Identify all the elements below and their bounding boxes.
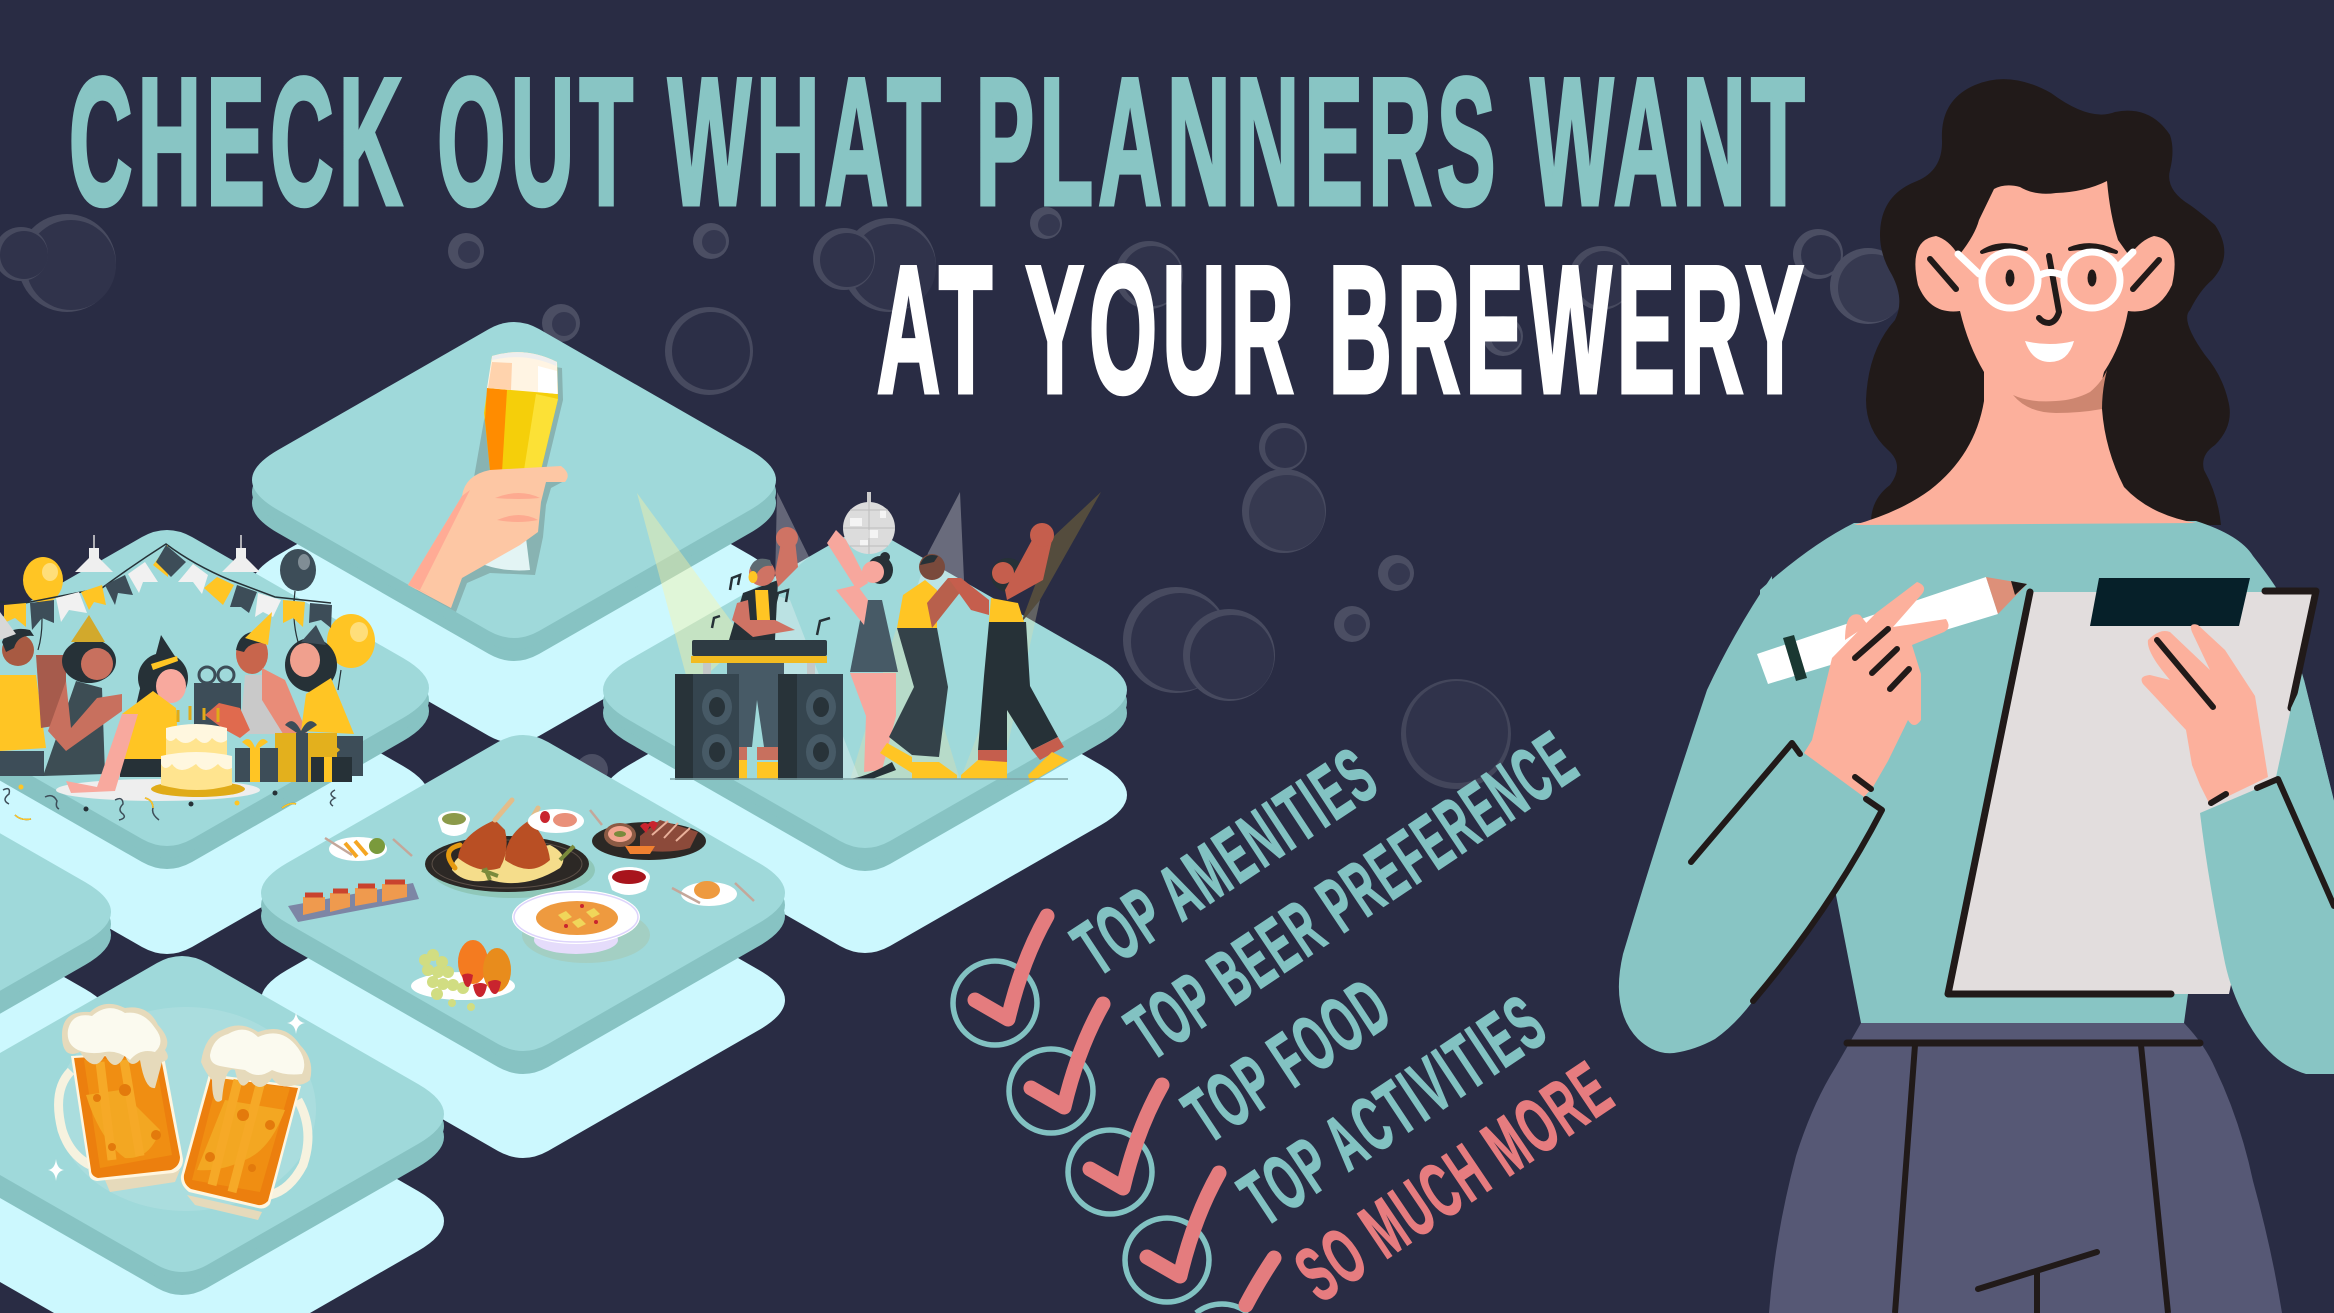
bunting xyxy=(0,544,332,630)
speakers xyxy=(675,674,843,780)
dancer man xyxy=(880,554,962,779)
hand right xyxy=(2142,624,2268,805)
party gift box xyxy=(194,667,241,731)
arm left xyxy=(1619,576,1882,1053)
check item five xyxy=(1196,1258,1274,1313)
nose xyxy=(2039,256,2059,323)
dancer woman two xyxy=(948,523,1068,783)
skirt pleats xyxy=(1895,1045,2168,1313)
pencil xyxy=(1757,577,2027,684)
woman planner xyxy=(1619,79,2334,1313)
tile: mugs xyxy=(0,956,444,1313)
sleeve left lines xyxy=(1691,743,1882,1001)
mug left xyxy=(59,1004,183,1192)
arm right sleeve xyxy=(2200,680,2334,1074)
fruit plate xyxy=(411,940,515,1011)
party lamps xyxy=(75,535,260,572)
tile: left edge xyxy=(0,754,111,1177)
party guest two xyxy=(43,615,122,776)
party guest one xyxy=(0,612,66,776)
mouth xyxy=(2025,341,2074,362)
eyebrows xyxy=(1982,245,2116,252)
main plate xyxy=(425,800,595,898)
sleeve right lines xyxy=(2257,779,2334,906)
illustration: hand holding beer glass xyxy=(408,352,568,612)
mug right xyxy=(181,1025,311,1220)
belt xyxy=(1847,1040,2200,1046)
tile: dj xyxy=(603,532,1127,953)
glasses xyxy=(1958,252,2133,308)
clipboard paper xyxy=(1948,592,2314,994)
music notes xyxy=(712,575,830,635)
checklist xyxy=(953,916,1274,1313)
party guest five xyxy=(285,625,363,776)
birthday cake xyxy=(151,706,245,797)
stage lights xyxy=(637,492,1101,780)
disco ball xyxy=(843,492,895,554)
party balloons xyxy=(23,549,375,690)
sushi tray xyxy=(288,882,419,922)
skirt xyxy=(1769,1023,2282,1313)
list: top beer preference: TOP BEER PREFERENCE xyxy=(1112,714,1593,1076)
hand left xyxy=(1804,582,1949,797)
check item two xyxy=(1009,1004,1103,1133)
list: so much more: SO MUCH MORE xyxy=(1280,1044,1628,1313)
ears xyxy=(1915,236,2175,311)
list: top activities: TOP ACTIVITIES xyxy=(1225,977,1562,1242)
illustration: dj and dancers xyxy=(637,492,1101,783)
soup bowl xyxy=(512,890,650,963)
party guest three xyxy=(66,635,188,793)
torso and shoulders xyxy=(1760,521,2334,1023)
illustration: birthday party xyxy=(0,535,375,820)
clipboard clip xyxy=(2090,578,2250,626)
party guest four xyxy=(205,612,310,745)
illustration: food spread xyxy=(288,800,754,1011)
dancer woman xyxy=(827,530,898,779)
sparkles xyxy=(48,1012,305,1181)
tile: party xyxy=(0,530,429,954)
meat plate xyxy=(592,820,706,860)
check item one xyxy=(953,916,1047,1045)
confetti xyxy=(3,784,335,820)
party gifts xyxy=(235,721,352,782)
tile: food xyxy=(261,735,785,1158)
dj figure xyxy=(727,527,798,779)
dj table xyxy=(691,640,827,674)
illustration: clinking beer mugs xyxy=(48,1004,316,1220)
sauce cups xyxy=(438,811,650,895)
check item four xyxy=(1125,1173,1219,1302)
tile: beer xyxy=(252,322,776,743)
eyes xyxy=(2006,270,2096,286)
neck and face xyxy=(1854,181,2196,525)
floating bubbles xyxy=(0,207,2207,789)
check item three xyxy=(1068,1085,1162,1214)
list: top amenities: TOP AMENITIES xyxy=(1058,730,1393,992)
party table xyxy=(56,779,260,801)
hair xyxy=(1866,79,2230,525)
side plates xyxy=(325,809,754,906)
clipboard outline xyxy=(1948,591,2316,994)
chin shadow xyxy=(2013,370,2107,413)
floor line xyxy=(670,778,1068,780)
list: top food: TOP FOOD xyxy=(1169,961,1407,1159)
